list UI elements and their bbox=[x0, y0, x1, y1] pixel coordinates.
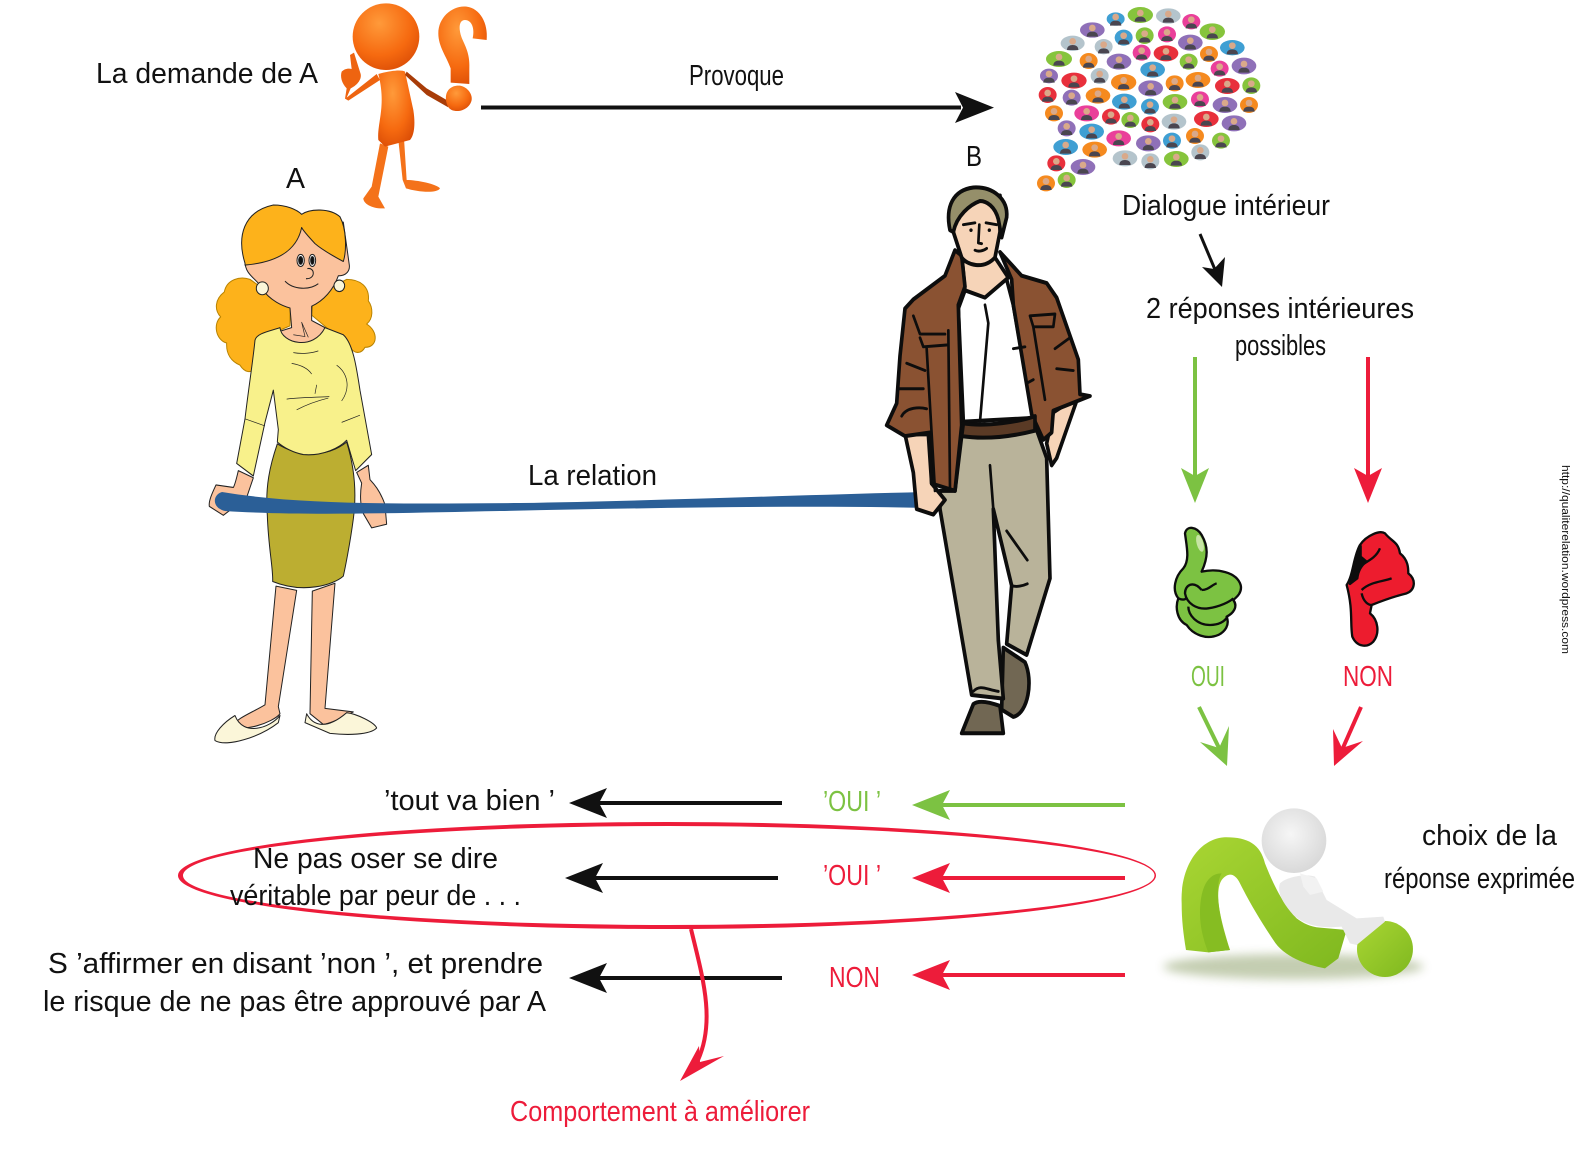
text: 2 réponses intérieures possibles: possibles bbox=[1235, 330, 1326, 362]
arrow: provoque bbox=[481, 92, 994, 123]
text: source url: http://qualiterelation.wordpress.com bbox=[1559, 465, 1571, 654]
arrow: green to OUI bbox=[912, 790, 1125, 820]
label: 'OUI' green: ’OUI ’ bbox=[823, 786, 881, 818]
text: S'affirmer en disant non: le risque de ne pas être approuvé par A bbox=[43, 986, 547, 1018]
arrow: green down bbox=[1181, 357, 1209, 503]
figure: woman A bbox=[209, 205, 387, 743]
figure: man B bbox=[887, 187, 1090, 733]
text: Ne pas oser se dire véritable par peur de: Ne pas oser se dire bbox=[253, 843, 498, 875]
text: 2 réponses intérieures possibles: 2 réponses intérieures bbox=[1146, 293, 1414, 325]
text: Ne pas oser se dire véritable par peur de bbox=[230, 843, 521, 912]
text: Comportement à améliorer: Comportement à améliorer bbox=[510, 1096, 810, 1128]
text: S'affirmer en disant non bbox=[43, 948, 547, 1018]
arrow: green diagonal bbox=[1199, 707, 1229, 766]
arrow: black to tout va bien bbox=[569, 788, 782, 818]
text: choix de la réponse exprimée bbox=[1384, 820, 1575, 895]
band: the relation between A and B bbox=[215, 492, 930, 514]
icon: thumb down bbox=[1347, 532, 1414, 646]
ellipse: highlight around second row bbox=[178, 822, 1156, 929]
text: La demande de A: La demande de A bbox=[96, 58, 319, 90]
arrow: red diagonal bbox=[1333, 707, 1363, 766]
label: 'OUI' red: ’OUI ’ bbox=[823, 860, 881, 892]
arrow: black third row bbox=[569, 963, 782, 993]
icon: figure thinking on green question mark bbox=[1163, 808, 1423, 979]
text: Ne pas oser se dire véritable par peur de: véritable par peur de . . . bbox=[230, 880, 521, 912]
icon: thumb up bbox=[1175, 528, 1241, 637]
icon: orange figure with question mark bbox=[341, 3, 487, 208]
arrow: black second row bbox=[565, 863, 778, 893]
text: La relation: La relation bbox=[528, 460, 657, 492]
label: OUI: OUI bbox=[1191, 661, 1225, 693]
text: Provoque: Provoque bbox=[689, 60, 784, 92]
icon: speech bubble of faces bbox=[1037, 7, 1260, 191]
arrow: red second row bbox=[912, 863, 1125, 893]
text: choix de la réponse exprimée: choix de la bbox=[1422, 820, 1558, 852]
arrow: curved red to comportement bbox=[680, 929, 724, 1081]
text: tout va bien: ’tout va bien ’ bbox=[384, 785, 555, 817]
arrow: to inner responses bbox=[1200, 234, 1225, 287]
label: NON red: NON bbox=[829, 962, 880, 994]
label: NON: NON bbox=[1343, 661, 1393, 693]
text: S'affirmer en disant non: S ’affirmer en disant ’non ’, et prendre bbox=[48, 948, 543, 980]
label: B: B bbox=[966, 141, 982, 173]
label: A: A bbox=[286, 163, 306, 195]
arrow: red third row bbox=[912, 960, 1125, 990]
text: 2 réponses intérieures possibles bbox=[1146, 293, 1414, 362]
arrow: red down bbox=[1354, 357, 1382, 503]
text: Dialogue intérieur: Dialogue intérieur bbox=[1122, 190, 1330, 222]
